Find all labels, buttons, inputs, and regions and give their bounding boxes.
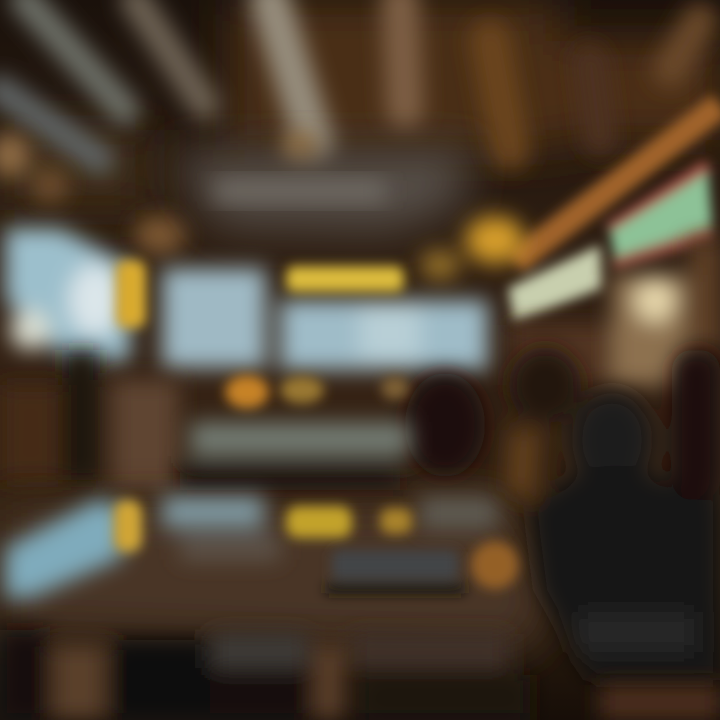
ceiling warm haze (0, 0, 720, 210)
central grey ceiling band (170, 150, 470, 230)
yellow ceiling lamps (420, 216, 525, 280)
orange mid lights (225, 375, 409, 409)
lit screens (5, 228, 488, 370)
table centre object (325, 550, 465, 594)
central ceiling highlight (215, 180, 385, 202)
table surface (0, 500, 550, 650)
table yellow reflections (114, 500, 519, 589)
table reflections (5, 496, 498, 598)
mid grey counter (180, 422, 410, 490)
yellow panels (116, 260, 404, 328)
seated people silhouettes (505, 347, 720, 680)
ceiling warm lights (0, 133, 318, 255)
right lit column (510, 240, 720, 385)
floor and foreground (0, 630, 720, 720)
mid-room shadows (0, 350, 485, 490)
ceiling beams (0, 0, 700, 160)
right diagonal beam and signs (508, 105, 720, 322)
